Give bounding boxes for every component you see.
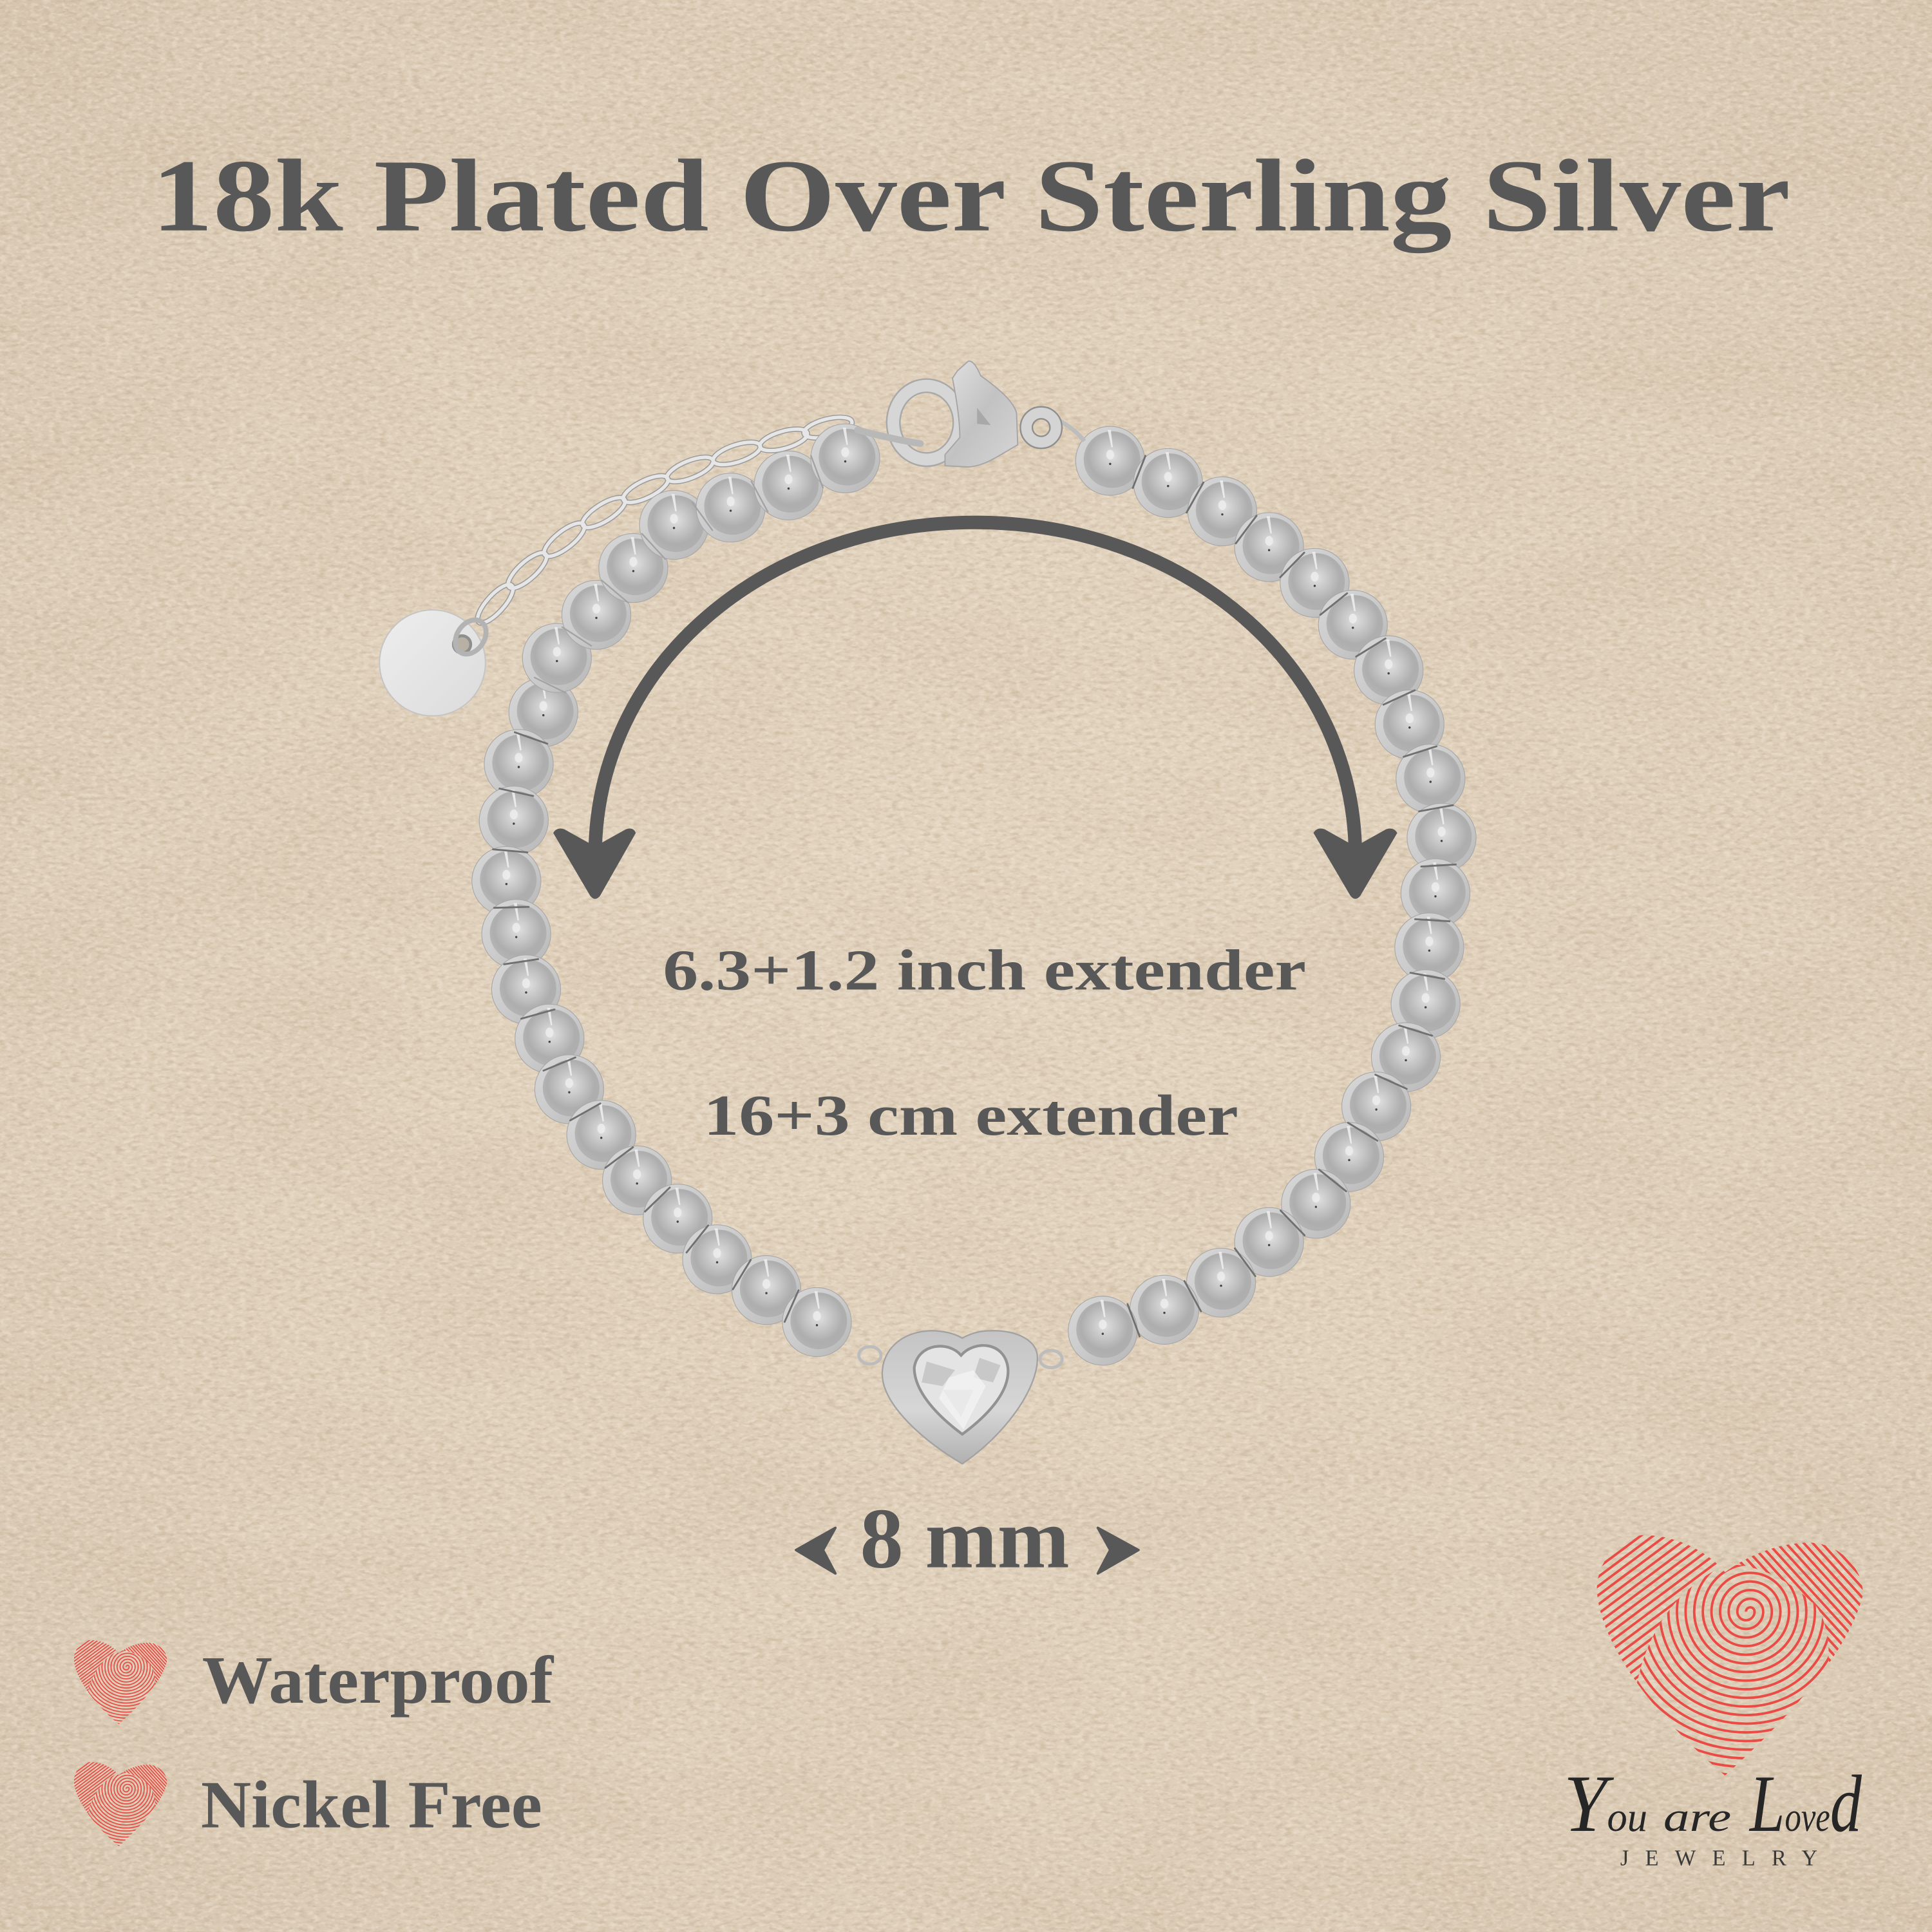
- heart pendant: [859, 1331, 1062, 1464]
- logo script: You: [1564, 1759, 1647, 1849]
- logo: [1564, 1408, 1918, 1871]
- logo script: are: [1663, 1794, 1731, 1841]
- length centimeters: 16+3 cm extender: [703, 1084, 1238, 1148]
- round tag: [379, 610, 493, 716]
- length inches: 6.3+1.2 inch extender: [663, 938, 1306, 1002]
- width label: [796, 1491, 1139, 1586]
- logo script: Loved: [1748, 1759, 1862, 1849]
- bracelet: [379, 361, 1476, 1464]
- icon: fingerprint heart: [66, 1718, 187, 1869]
- beads: [472, 424, 1476, 1365]
- logo fingerprint heart: [1573, 1408, 1918, 1840]
- logo wordmark: JEWELRY: [1620, 1846, 1817, 1871]
- title: 18k Plated Over Sterling Silver: [151, 138, 1790, 254]
- feature: waterproof: Waterproof: [202, 1642, 554, 1718]
- extender chain: [473, 413, 854, 628]
- feature: waterproof: [66, 1596, 554, 1747]
- arrow: circumference arc: [553, 522, 1397, 899]
- feature: nickel free: [66, 1718, 542, 1869]
- feature: nickel free: Nickel Free: [201, 1766, 542, 1842]
- logo script: [1564, 1759, 1862, 1849]
- icon: fingerprint heart: [66, 1596, 187, 1747]
- width label: 8 mm: [860, 1491, 1070, 1586]
- bead joints: [493, 456, 1456, 1336]
- lobster clasp: [858, 361, 1084, 467]
